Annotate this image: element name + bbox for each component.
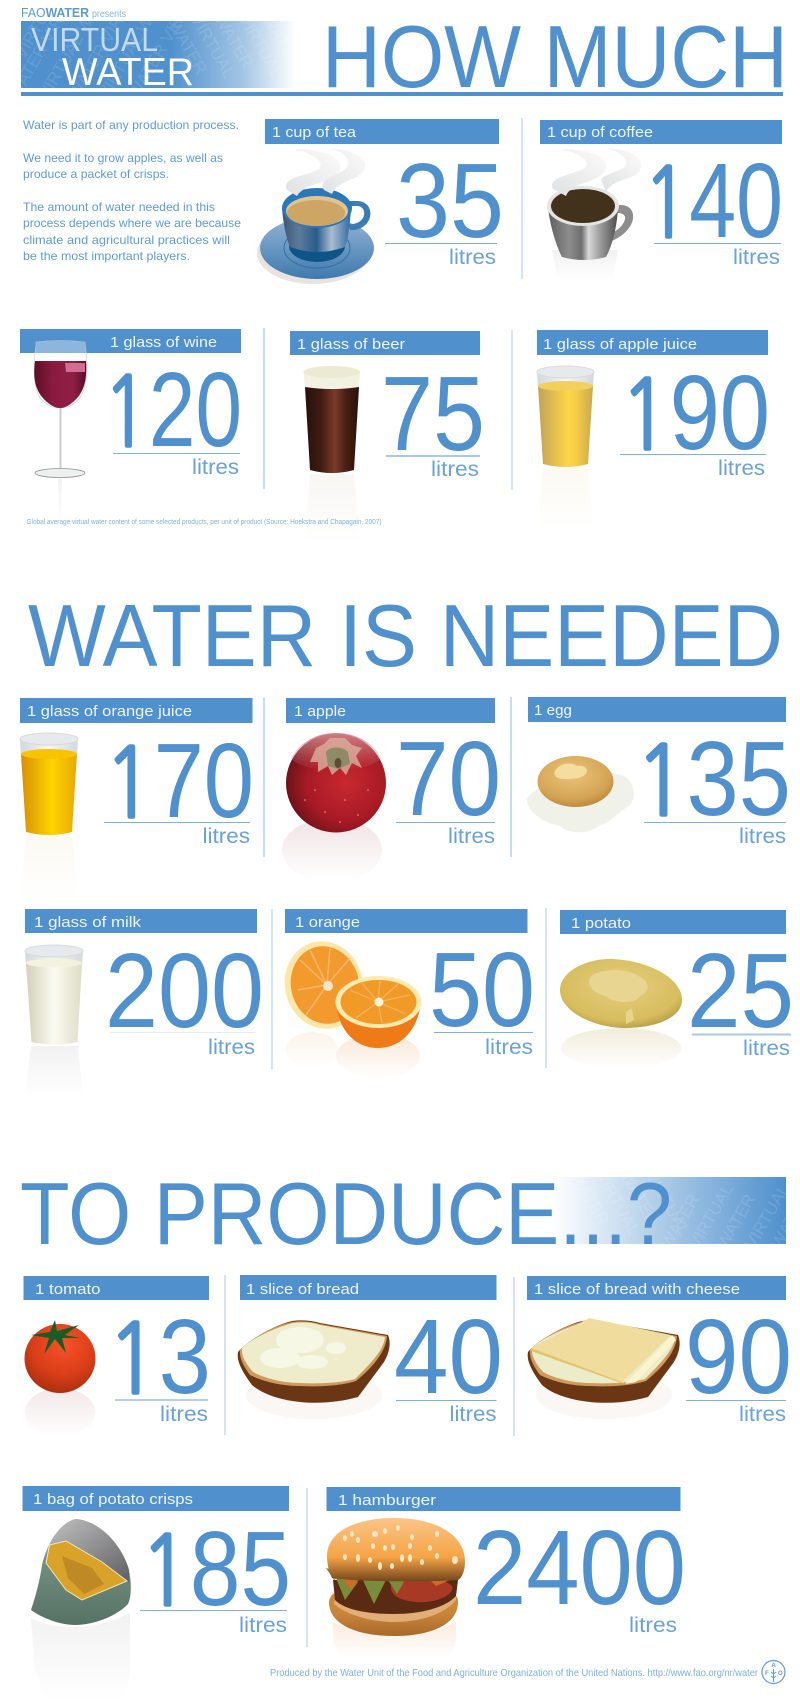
title: HOW MUCH [21,7,788,106]
panel: glass of apple juice [537,330,770,530]
icon: FAO logo [762,1660,785,1684]
banner: Virtual Water [21,21,290,88]
logo line: FAOWATER presents [21,5,126,20]
icon: potato [560,959,682,1068]
value: 200 litres: 200 [105,932,264,1050]
value: 25 litres: litres [743,1037,790,1060]
label: 1 glass of apple juice: 1 glass of apple juice [543,336,697,353]
icon: orange [276,933,422,1078]
icon: wine glass [34,340,87,525]
value: 40 litres: litres [450,1403,496,1426]
value: 170 litres: litres [202,825,250,848]
banner: Virtual Water: VIRTUAL [31,21,158,58]
icon: FAO logo: A [772,1663,776,1669]
divider [514,1277,515,1436]
icon: milk glass [25,945,83,1097]
icon: egg [527,756,634,832]
banner: Virtual Water: VIRTUAL [235,10,287,82]
panel: potato [560,910,794,1068]
icon: apple juice glass [537,366,594,530]
value: 185 litres: 185 [140,1510,291,1628]
value: 70 litres: 70 [396,720,501,838]
divider [264,328,265,489]
label: 1 egg: 1 egg [534,702,572,719]
value: 120 litres: litres [192,456,239,479]
panel: glass of orange juice [20,698,254,900]
label: 1 potato: 1 potato [571,915,631,932]
label: 1 slice of bread: 1 slice of bread [246,1281,359,1298]
value: 90 litres: 90 [685,1298,792,1416]
panel: tomato [24,1276,211,1436]
icon: FAO logo: F [765,1671,769,1677]
divider [510,697,512,857]
panel: cup of tea [257,119,504,284]
label: 1 orange: 1 orange [295,914,360,931]
title: TO PRODUCE...?: TO PRODUCE...? [20,1164,672,1263]
label: 1 bag of potato crisps: 1 bag of potato crisps [33,1491,193,1508]
intro text: be the most important players. [23,249,190,263]
value: 75 litres: litres [431,458,479,481]
icon: hamburger [326,1518,465,1658]
label: 1 potato [560,910,786,934]
label: 1 tomato [24,1276,209,1300]
value: 40 litres: 40 [394,1298,503,1416]
panel: egg [527,697,791,848]
icon: tomato [24,1320,96,1436]
label: 1 tomato: 1 tomato [35,1281,100,1298]
divider [306,1488,308,1647]
banner: Virtual Water: WATER [165,16,211,78]
divider [224,1275,226,1435]
banner: Virtual Water: WATER [211,10,257,72]
value: 13 litres: litres [160,1403,208,1426]
value: 140 litres: litres [733,246,780,269]
title: TO PRODUCE...?: VIRTUAL [642,1168,694,1239]
label: 1 cup of tea: 1 cup of tea [272,124,357,141]
value: 70 litres: litres [448,825,495,848]
intro text: Water is part of any production process. [23,118,239,132]
label: 1 slice of bread with cheese: 1 slice of bread with cheese [534,1281,740,1298]
label: 1 orange [285,909,528,933]
title: TO PRODUCE...?: WATER [617,1168,663,1229]
value: 50 litres: 50 [429,931,535,1049]
value: 120 litres: 120 [103,351,242,469]
label: 1 glass of milk: 1 glass of milk [34,914,142,931]
banner: Virtual Water: VIRTUAL [187,10,239,82]
value: 135 litres: litres [739,825,786,848]
value: 200 litres: litres [208,1036,255,1059]
divider [546,908,547,1068]
label: 1 cup of coffee [540,120,782,144]
value: 75 litres: 75 [381,355,485,473]
panel: cup of coffee [540,120,783,280]
logo line: FAOWATER presents: presents [92,9,126,20]
label: 1 glass of milk [25,909,257,933]
value: 35 litres: litres [449,246,496,269]
panel: apple [282,698,501,882]
title: TO PRODUCE...?: VIRTUAL [592,1168,644,1239]
title: TO PRODUCE...?: VIRTUAL [741,1181,793,1252]
icon: coffee cup [547,148,641,280]
intro text: process depends where we are because [23,216,241,230]
value: 13 litres: 13 [107,1298,211,1416]
label: 1 glass of apple juice [537,330,768,355]
icon: FAO logo: O [778,1671,783,1677]
value: 90 litres: litres [739,1403,786,1426]
icon: beer glass [304,366,360,545]
value: 185 litres: litres [239,1614,287,1637]
intro text [23,118,241,263]
title: TO PRODUCE...?: WATER [567,1168,613,1229]
label: 1 apple: 1 apple [294,703,346,720]
value: 35 litres: 35 [396,142,504,260]
title: TO PRODUCE...? [22,1177,786,1245]
source note: Global average virtual water content of some selected products, per unit of product (Source: Hoekstra and Chapagain, 2007) [26,519,382,526]
value: 170 litres: 170 [104,722,254,840]
label: 1 slice of bread with cheese [527,1276,786,1300]
panel: glass of milk [25,909,264,1097]
label: 1 apple [286,698,495,723]
label: 1 glass of orange juice: 1 glass of orange juice [27,703,192,720]
icon: bread with cheese [528,1318,680,1419]
panel: hamburger [326,1487,686,1658]
label: 1 cup of tea [265,119,499,144]
icon: apple [282,733,386,882]
label: 1 glass of wine: 1 glass of wine [110,334,217,351]
value: 190 litres: 190 [620,354,770,472]
logo line: FAOWATER presents: FAOWATER [21,5,90,20]
panel: glass of beer [290,331,485,545]
divider [522,118,523,279]
panel: glass of wine [20,329,242,525]
divider [264,698,265,857]
icon: bread slice [238,1320,390,1419]
intro text: The amount of water needed in this [23,200,215,214]
icon: tea cup [257,148,374,284]
value: 190 litres: litres [718,457,765,480]
divider [272,909,273,1069]
title: TO PRODUCE...?: WATER [713,1191,759,1252]
intro text: produce a packet of crisps. [23,167,169,181]
banner: Virtual Water: WATER [62,51,194,94]
label: 1 bag of potato crisps [22,1486,289,1511]
label: 1 glass of beer: 1 glass of beer [297,336,405,353]
label: 1 glass of orange juice [20,698,252,723]
label: 1 slice of bread [240,1275,496,1300]
panel: slice of bread [238,1275,503,1426]
banner: Virtual Water: WATER [259,10,305,72]
value: 135 litres: 135 [635,720,791,838]
label: 1 glass of beer [290,331,480,355]
value: 2400 litres: 2400 [473,1509,686,1627]
panel: orange [276,909,535,1078]
panel: bag of potato crisps [22,1486,291,1700]
label: 1 hamburger: 1 hamburger [338,1492,436,1509]
icon: orange juice glass [20,733,78,900]
panel: slice of bread with cheese [527,1276,792,1426]
label: 1 cup of coffee: 1 cup of coffee [547,124,653,141]
label: 1 egg [528,697,786,722]
intro text: climate and agricultural practices will [23,233,230,247]
divider [512,330,513,490]
label: 1 hamburger [326,1487,680,1511]
intro text: We need it to grow apples, as well as [23,151,223,165]
value: 2400 litres: litres [629,1614,677,1637]
icon: crisps bag [31,1519,131,1700]
title: TO PRODUCE...?: VIRTUAL [685,1181,737,1252]
label: 1 glass of wine [20,329,241,353]
value: 50 litres: litres [485,1036,533,1059]
title: TO PRODUCE...?: WATER [657,1191,703,1252]
